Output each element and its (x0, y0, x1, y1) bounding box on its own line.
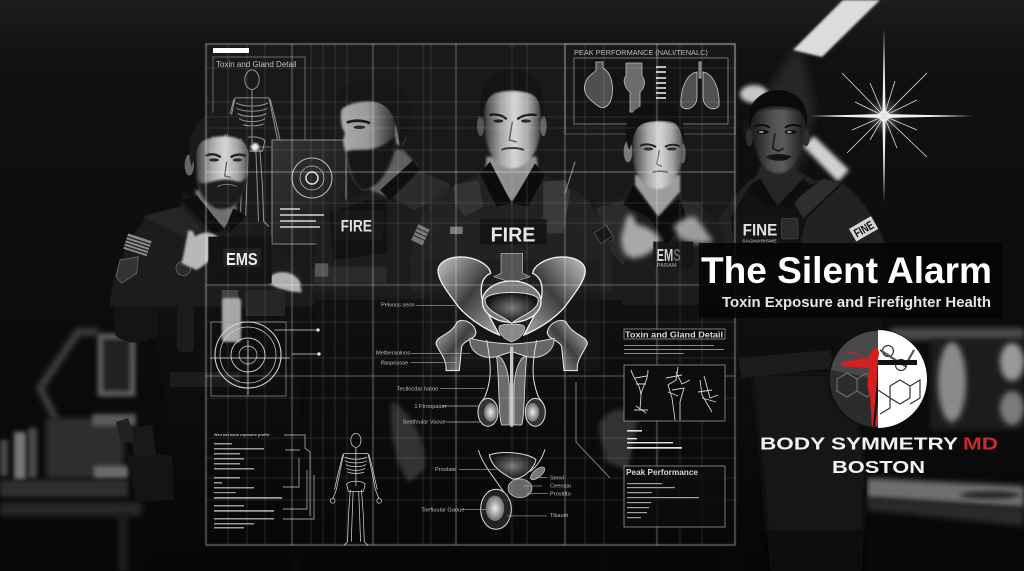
anatomy labels: Ceensar (550, 484, 571, 490)
anatomy labels: Metberanloos (376, 351, 410, 357)
anatomy labels: Proolate (435, 467, 456, 473)
panel: target schematic (210, 322, 320, 396)
callout line (576, 382, 610, 478)
anatomy labels: Prosldto (550, 491, 571, 497)
logo: Body Symmetry MD emblem (829, 330, 927, 428)
lower body and glove (145, 300, 312, 571)
brand name (760, 434, 998, 477)
brand name: BOSTON (832, 457, 925, 477)
sleeve patch (593, 224, 614, 246)
anatomy labels: Pelvoss seon (381, 302, 415, 308)
figure: firefighter far right, FINE vest: FINE (743, 220, 777, 239)
organ labels (656, 66, 666, 99)
utility pouch (222, 298, 241, 342)
straps (453, 180, 483, 217)
panel: lower-left text block: Wen bot toxin exposure profile (214, 433, 270, 437)
hair (748, 90, 807, 128)
pelvic ring (482, 281, 541, 322)
panel: top-right organ diagram: PEAK PERFORMANCE (NALI/TENALC) (574, 48, 708, 57)
panel: Toxin and Gland Detail: Toxin and Gland Detail (625, 330, 723, 340)
ear (393, 121, 405, 145)
lower body (728, 300, 885, 571)
anatomy labels: Toefiuular Gaoue (421, 507, 464, 513)
vest label (480, 219, 547, 244)
pelvic anatomy diagram (376, 253, 600, 529)
left hip bone (438, 257, 499, 335)
panel: holographic display (272, 140, 346, 244)
figure: firefighter far right, FINE vest: SAGHARISME (742, 238, 777, 244)
hexagons (837, 346, 920, 414)
anatomy labels: Tectlocdar hatoe (397, 386, 438, 392)
shafts (497, 356, 527, 425)
neck (195, 190, 237, 228)
figure: bearded firefighter: FIRE (341, 217, 372, 236)
panel: lower-left text block (214, 433, 314, 528)
neck and collar (753, 165, 803, 205)
testes (478, 398, 545, 426)
antenna (565, 162, 575, 193)
figure: firefighter far right, FINE vest (703, 90, 890, 571)
beard (197, 175, 247, 209)
eyes (754, 125, 801, 128)
torso (703, 172, 890, 305)
name tag (450, 227, 463, 234)
shoulder patch: FINE (851, 218, 876, 240)
figure: central firefighter, FIRE vest (391, 69, 638, 571)
brow and eye (347, 121, 370, 123)
spermatic cords (478, 340, 545, 412)
gland sketches (631, 367, 718, 420)
neck (370, 150, 418, 197)
icon: lower skeleton (330, 433, 381, 545)
flag patch (123, 233, 152, 256)
panel: Peak Performance (624, 466, 725, 527)
vest label (208, 237, 272, 283)
icon: heart (584, 62, 613, 108)
hair (336, 78, 410, 147)
figure: firefighter left, EMS vest (110, 112, 313, 571)
overlay grid (206, 44, 735, 545)
panel: Peak Performance: Peak Performance (626, 467, 698, 477)
sleeve patch: FIRE (596, 228, 611, 242)
figure: bearded firefighter (300, 78, 470, 571)
bladder (485, 292, 538, 323)
neck (485, 157, 538, 202)
anatomy labels: Ifanpossae (381, 360, 408, 366)
hair (189, 112, 249, 167)
icon: lungs (681, 62, 719, 109)
flag patch (411, 224, 430, 245)
neck (635, 175, 680, 217)
title: The Silent Alarm (701, 250, 992, 291)
figure: firefighter centre-right, EMS vest (590, 103, 735, 571)
face (341, 101, 395, 190)
brand name: BODY SYMMETRY (760, 434, 958, 454)
eyes (205, 154, 246, 157)
hair (479, 69, 544, 120)
leader lines (411, 305, 547, 516)
face (633, 121, 683, 189)
panel: top-left skeleton detail: Toxin and Gland Detail (216, 60, 297, 69)
hands (182, 230, 221, 270)
beard (346, 137, 395, 191)
vest label (333, 210, 383, 240)
lower cross-section diagram (489, 453, 536, 479)
eyes (489, 114, 537, 119)
left femur (436, 320, 476, 371)
panel: top-right organ diagram (565, 44, 735, 134)
right femur (547, 320, 587, 371)
face (485, 91, 540, 168)
red figure (841, 348, 879, 426)
watch (176, 261, 191, 276)
figure: firefighter centre-right, EMS vest: EMS (657, 245, 681, 265)
right hip bone (524, 257, 585, 335)
face (753, 109, 803, 173)
anatomy labels: 1 Ftroopaion (414, 404, 446, 410)
ischium band (470, 338, 554, 357)
vest patch (737, 217, 798, 245)
figure: firefighter left, EMS vest: EMS (226, 249, 258, 269)
anatomy labels: Tikaum (550, 513, 569, 519)
right lab shelves (890, 328, 1024, 340)
icon: star flare (810, 28, 973, 203)
holster (127, 455, 174, 502)
right sleeve patch (594, 225, 613, 244)
face (196, 136, 249, 208)
figure: firefighter centre-right, EMS vest: PARAM (657, 263, 677, 269)
anatomy labels: Senvi (550, 475, 564, 481)
ears (746, 129, 753, 146)
title block (699, 243, 1002, 318)
figure: central firefighter, FIRE vest: FIRE (491, 223, 535, 246)
subtitle: Toxin Exposure and Firefighter Health (722, 295, 991, 311)
prostate (499, 324, 525, 342)
lab monitor and arm (100, 336, 133, 394)
round patch (116, 257, 138, 283)
hair (626, 103, 684, 150)
anatomy labels (376, 302, 571, 519)
panel: Toxin and Gland Detail (624, 329, 725, 449)
icon: knee joint (624, 63, 644, 112)
hands (621, 213, 660, 258)
panel: top-left skeleton detail (213, 48, 305, 227)
brand name: MD (963, 434, 998, 454)
eyes (640, 144, 680, 147)
vest label (653, 242, 693, 268)
sacrum (494, 253, 530, 283)
anatomy labels: Sestfoular Vaoue (403, 420, 446, 426)
